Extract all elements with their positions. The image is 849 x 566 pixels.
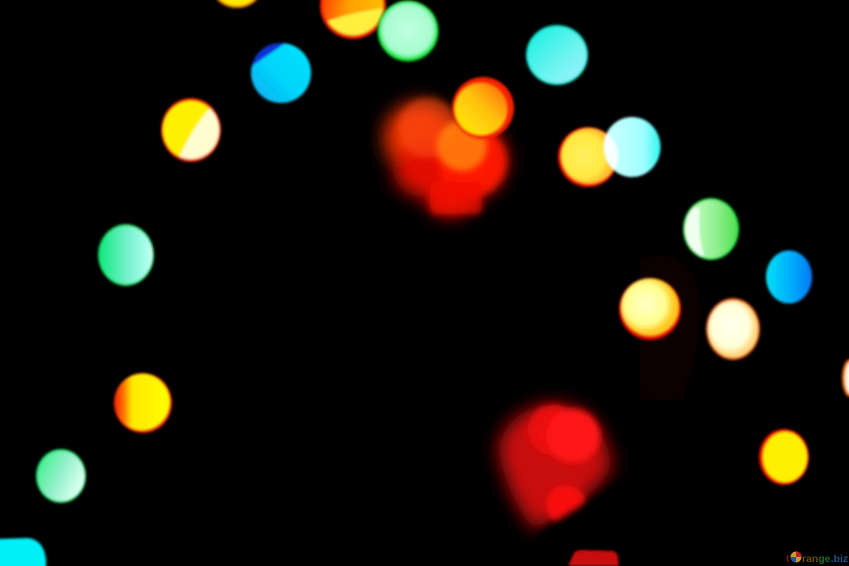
red light at bottom edge [568, 550, 619, 566]
watermark logo: t [786, 553, 790, 565]
watermark logo: range.biz [802, 553, 848, 565]
light: blue right [766, 250, 812, 304]
light: right edge [842, 359, 849, 397]
light: yellow left [161, 98, 225, 165]
light: blue [248, 40, 311, 103]
light: pale cream [706, 298, 760, 360]
light: top yellow [214, 0, 260, 8]
light: pale green lower left [36, 449, 86, 503]
light: cyan bottom left [0, 538, 46, 566]
light: top pale green [378, 0, 438, 62]
light: green right [680, 198, 739, 260]
light: teal left [98, 224, 154, 286]
light: yellow lower right [759, 429, 809, 485]
red blurred cluster: lower [498, 404, 640, 566]
light: cyan top right [526, 25, 588, 85]
light: gold left [114, 373, 172, 433]
red blurred cluster: upper [384, 98, 506, 216]
light: pale yellow with red rim [619, 278, 681, 340]
light: pale cyan [602, 115, 662, 179]
light: yellow with red rim [558, 127, 618, 187]
light: top orange [320, 0, 390, 40]
watermark logo [786, 552, 848, 565]
light: orange upper centre [452, 77, 514, 139]
faint dark red halo [640, 255, 700, 400]
